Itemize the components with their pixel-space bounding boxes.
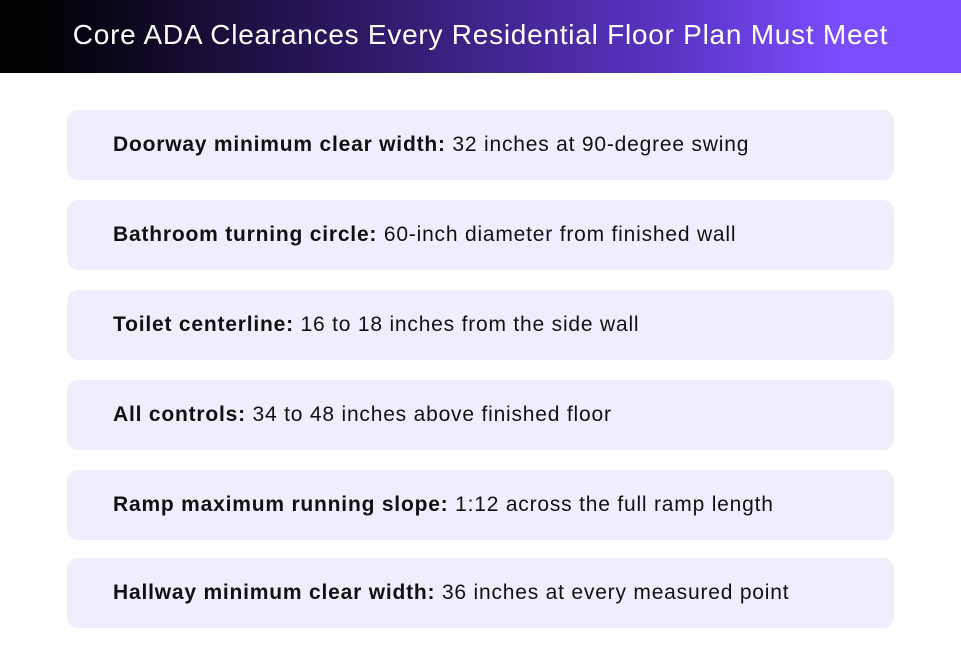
- card: controls: [67, 380, 894, 450]
- card: controls: All controls: 34 to 48 inches above finished floor: [113, 403, 612, 426]
- card: doorway: [67, 110, 894, 180]
- header banner: [0, 0, 961, 73]
- title: Core ADA Clearances Every Residential Floor Plan Must Meet: [73, 19, 888, 50]
- card: bathroom: Bathroom turning circle: 60-inch diameter from finished wall: [113, 223, 736, 246]
- card: doorway: Doorway minimum clear width: 32 inches at 90-degree swing: [113, 133, 749, 156]
- card: ramp: [67, 470, 894, 540]
- card: hallway: [67, 558, 894, 628]
- card: toilet: [67, 290, 894, 360]
- card: ramp: Ramp maximum running slope: 1:12 across the full ramp length: [113, 493, 774, 516]
- card: hallway: Hallway minimum clear width: 36 inches at every measured point: [113, 581, 789, 604]
- card: toilet: Toilet centerline: 16 to 18 inches from the side wall: [113, 313, 639, 336]
- card: bathroom: [67, 200, 894, 270]
